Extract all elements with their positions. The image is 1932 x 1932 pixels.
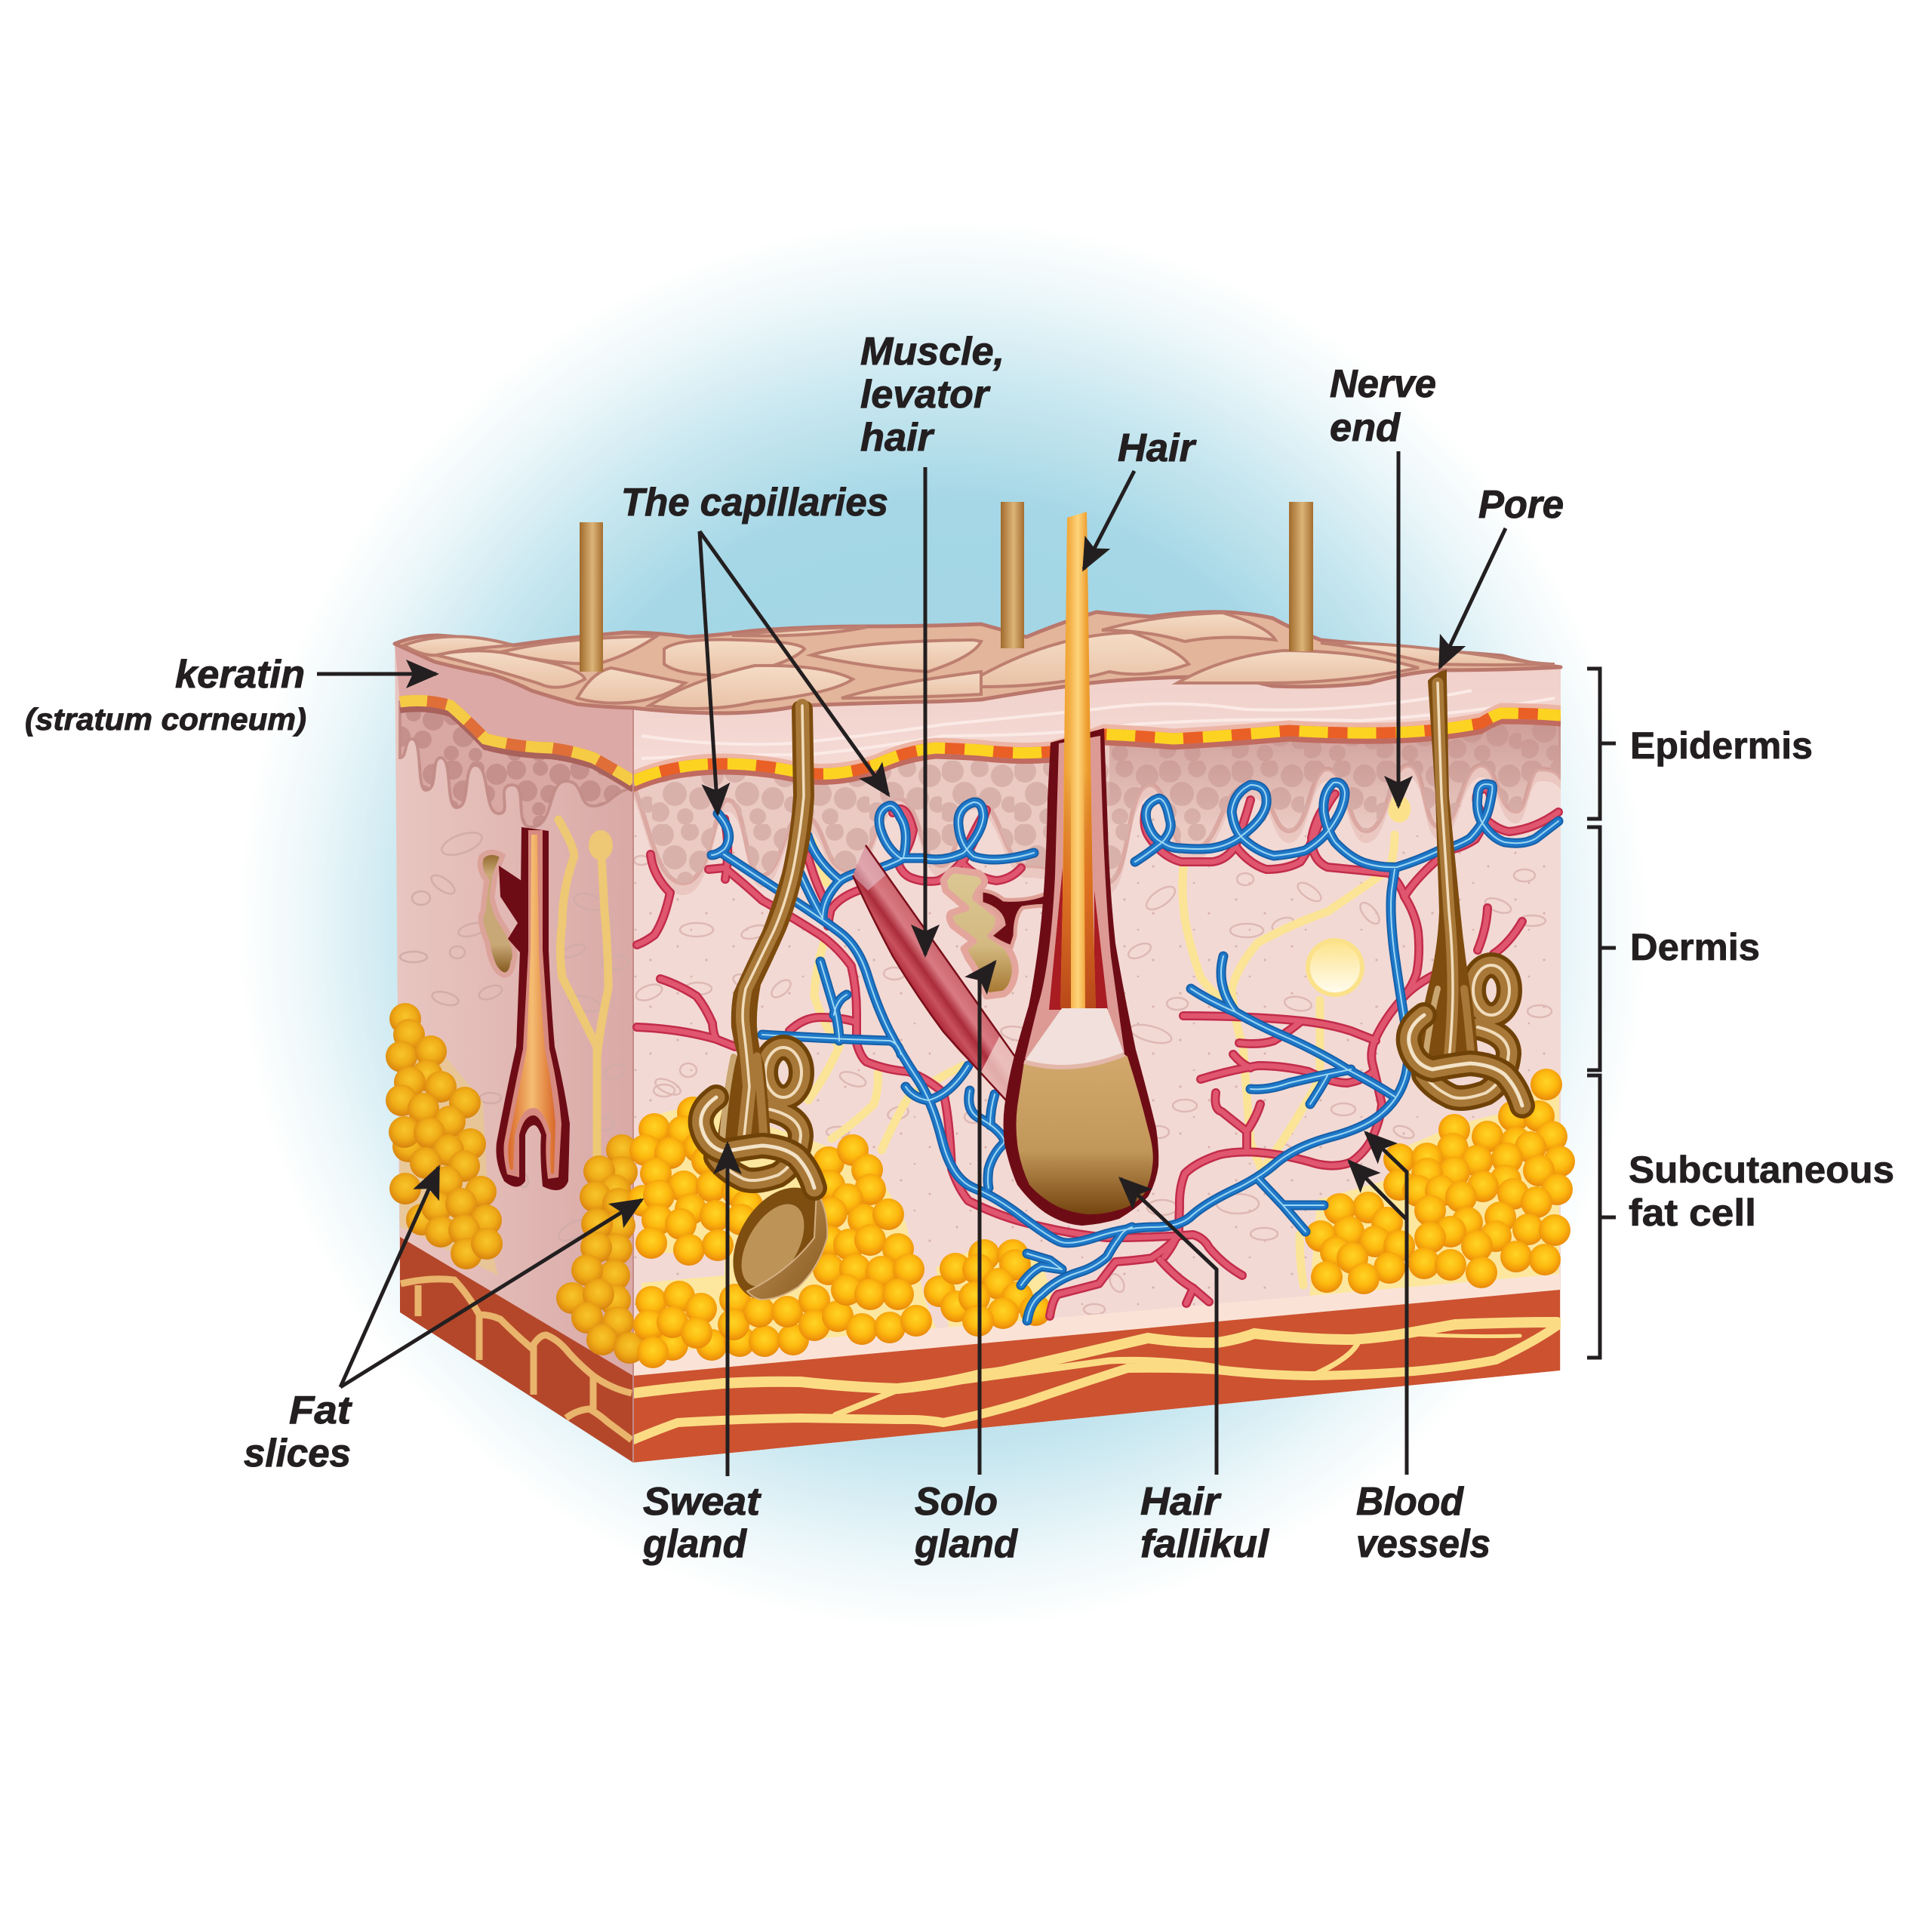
arrow: hair follicle [1121,1179,1217,1475]
label: muscle levator hair: hair [860,416,935,460]
bracket: subcutaneous [1587,1075,1616,1358]
cream strip above fascia [633,1274,1560,1376]
hair shaft left shading [1060,770,1071,1008]
label: dermis: Dermis [1630,926,1760,968]
left epidermis cell layer [400,700,633,827]
label: fat slices: slices [244,1432,351,1475]
arrow: capillaries left [700,531,718,814]
label: blood vessels: Blood [1356,1480,1464,1524]
skin surface scales [404,613,1555,709]
gland bowl outer [714,1171,845,1316]
left hair follicle [496,827,570,1190]
main hair follicle [1004,512,1158,1226]
label: muscle levator hair [860,330,1004,460]
arrow: fat slices left [340,1168,438,1387]
follicle red lining left [1049,868,1064,1010]
coil strands [716,1048,801,1180]
label: keratin: keratin [175,653,305,697]
label: hair fallikul: Hair [1140,1480,1222,1524]
bulb upper rim [1024,1054,1124,1067]
yellow membrane line front [633,706,1561,789]
brackets [1587,669,1616,1358]
sweat gland right (pore) [1409,669,1522,1106]
arrow: keratin [317,672,436,676]
fascia band front [633,1290,1560,1463]
red blood vessels [637,789,1558,1316]
fascia fibres front [633,1322,1559,1440]
muscle, levator hair [853,845,1017,1102]
label: nerve end [1330,362,1436,450]
arrow: pore [1440,528,1506,667]
arrow: capillaries right [700,531,888,795]
dermis stipple [633,792,1561,1381]
follicle red lining right [1094,891,1108,1010]
epidermis cell layer shadow [633,725,1561,895]
fat cells: right cluster [1305,1069,1575,1294]
label: muscle levator hair: Muscle, [860,330,1004,374]
right tube stripes [1425,683,1472,1060]
hair rod 2 [1001,502,1024,648]
label: solo gland: Solo [915,1480,998,1524]
label: blood vessels [1356,1480,1491,1566]
left dermis fill [395,644,633,1463]
label: solo gland: gland [914,1522,1018,1566]
panel: left face of skin block [395,644,633,1463]
follicle outer wall [1004,728,1158,1226]
right front strand [1409,1015,1522,1106]
label: epidermis: Epidermis [1630,724,1813,767]
fat cells: solo cluster [924,1239,1051,1337]
fat cells: left cluster [386,1003,503,1269]
label: sweat gland [642,1480,762,1566]
left fat cell backing [400,1011,498,1275]
icon: nerve ending bulb [1388,795,1411,823]
arrow: fat slices right [340,1200,641,1387]
arrow: hair [1084,471,1134,569]
label: subcutaneous fat cell: Subcutaneous [1629,1149,1894,1191]
label: subcutaneous fat cell [1629,1149,1894,1234]
fat cells: corner cluster [556,1134,645,1364]
epidermis cell layer front [633,713,1561,883]
bulb white cap [1024,1008,1124,1067]
arrow: blood vessels lower [1349,1161,1407,1220]
arrow: blood vessels upper [1366,1133,1407,1475]
label: nerve end: Nerve [1330,362,1436,406]
upper stratum band front [633,667,1561,781]
bracket: dermis [1587,827,1616,1070]
hair shaft right shading [1084,770,1096,1008]
arrows [317,451,1506,1476]
fat cell backing front [641,1079,1559,1358]
hair shaft [1060,512,1096,1008]
hair rod 1 [580,522,603,672]
arrow: solo gland [980,962,995,1475]
left deep fascia band [400,1237,633,1463]
label: keratin [25,653,306,737]
right tube body [1415,669,1479,1069]
sebaceous gland [943,870,1057,996]
label: fat slices [244,1389,353,1475]
label: subcutaneous fat cell: fat cell [1629,1192,1756,1234]
left nerves [558,820,613,1158]
stratum wave lines [641,691,1555,758]
left sebaceous gland [480,852,525,975]
edge between faces [632,708,634,1463]
fat cells: large front cluster [627,1097,932,1368]
label: keratin: (stratum corneum) [25,702,306,737]
gland bowl cover [747,1191,827,1300]
tube body [715,700,814,1151]
follicle inner pink wall [1025,736,1124,1072]
top surface of skin [395,612,1561,713]
label: fat slices: Fat [289,1389,353,1432]
label: nerve end: end [1330,406,1401,450]
label: muscle levator hair: levator [860,373,991,417]
sweat gland left [701,700,845,1316]
icon: nerve cell body [1308,940,1362,995]
blue blood vessels [712,783,1558,1321]
arrow: nerve end [1396,451,1401,806]
left dermis tissue ovals [400,828,629,1308]
gland bowl inner [728,1194,817,1297]
front dermis fill [634,768,1561,1463]
arrow: muscle [924,467,927,955]
label: sweat gland: gland [642,1522,747,1566]
label: blood vessels: vessels [1356,1522,1491,1566]
left yellow membrane line [400,700,633,789]
label: hair: Hair [1118,426,1197,470]
arrow: sweat gland [726,1144,729,1476]
hair bulb [1016,1054,1153,1214]
front strand [701,1097,814,1188]
nerve fibres [808,835,1395,1285]
right coil strands [1424,965,1509,1098]
bracket: epidermis [1587,669,1616,819]
hair rod 3 [1289,502,1313,651]
panel: front face of skin block [633,667,1561,1463]
label: hair fallikul [1140,1480,1270,1566]
label: solo gland [914,1480,1018,1566]
left fascia fibres [401,1279,632,1440]
tube stripes [722,706,804,1143]
front dermis tissue ovals [634,856,1552,1323]
label: the capillaries: The capillaries [621,481,888,525]
label: sweat gland: Sweat [643,1480,762,1524]
label: pore: Pore [1478,483,1564,527]
left upper stratum band [395,646,567,744]
label: hair fallikul: fallikul [1140,1522,1270,1566]
